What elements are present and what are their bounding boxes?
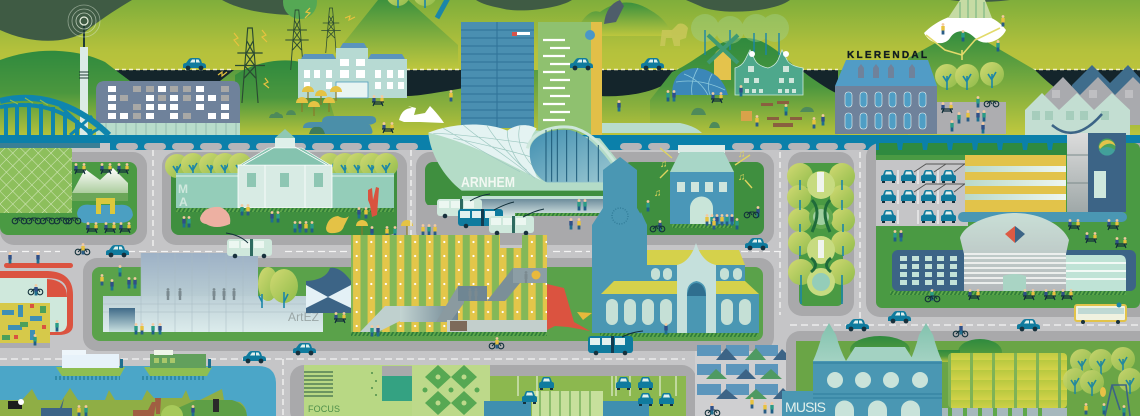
traffic on road 2: [243, 311, 1040, 363]
church: [600, 243, 759, 337]
panel: church block and house: [623, 145, 764, 235]
panel: Arnhem station block: [421, 124, 620, 236]
top hills and trees: [283, 0, 672, 70]
viaduct teeth over green: [876, 143, 1053, 150]
station glass front: [527, 127, 617, 182]
museum letters M and A: [178, 182, 188, 209]
yellow bus: [1075, 302, 1126, 324]
bush by pond: [309, 127, 325, 134]
sky background: [0, 0, 1140, 72]
panel: church block and house: ♫: [660, 159, 668, 170]
panel: sports field: [0, 252, 73, 348]
music notes: [660, 148, 752, 188]
parking lot: [876, 160, 968, 226]
road dashes on horizon: [115, 68, 1140, 70]
striped field east: [942, 353, 1067, 416]
cars on horizon: [570, 58, 664, 70]
panel: block A with lattice field: [0, 148, 137, 235]
yellow blob sculpture: [326, 216, 349, 233]
station name: ARNHEM: [461, 174, 515, 191]
dark cloud blobs: [0, 0, 1010, 41]
yellow stripe building: [965, 155, 1066, 212]
museum cupola: [275, 129, 295, 147]
water: [0, 366, 276, 416]
white school building: [298, 43, 407, 98]
ground background: [0, 70, 1140, 136]
ArtEZ lower wing: [103, 296, 323, 332]
red sculpture: [368, 187, 379, 217]
island with animals: [0, 388, 247, 416]
arena dome: [960, 213, 1069, 291]
panel: Focus block: [304, 365, 490, 416]
panel: fountain park: [787, 163, 855, 306]
pink blob sculpture: [200, 207, 230, 227]
music house: [670, 145, 734, 228]
panel: parking field: [484, 376, 686, 416]
blue pavilion: [306, 268, 351, 323]
teal band: [958, 212, 1127, 222]
allotment figures and beds: [617, 85, 825, 128]
panel: church block and house: ♫: [738, 149, 746, 160]
windmill: [708, 35, 738, 80]
road base: [0, 143, 1140, 416]
Klerendal snow cap and festival: [924, 0, 1006, 60]
panel: church block and house: ♫: [738, 172, 746, 183]
road outer rings: [0, 143, 1140, 416]
panel: neighbourhood houses: [695, 345, 786, 416]
row of houses right: [1025, 65, 1140, 135]
car on horizon road left: [183, 58, 206, 70]
striped building: [351, 235, 547, 336]
blue viaduct band: [0, 135, 1140, 150]
blue panel with logo: [1088, 133, 1126, 212]
panel: church block and house: ♫: [654, 188, 662, 199]
traffic on road 1: [75, 233, 768, 258]
smile arc: [1052, 114, 1102, 133]
electricity pylons: [218, 8, 355, 103]
diamonds field: [422, 365, 480, 415]
Musis label: MUSIS: [785, 399, 826, 415]
panel: ArtEZ block: [92, 235, 763, 341]
station lattice roof: [428, 124, 542, 181]
church tower: [592, 157, 647, 333]
umbrellas and lawn items: [269, 86, 453, 133]
gabled houses: [735, 50, 803, 95]
Klerendal plaza: [935, 62, 1006, 134]
faded lion and tree row: [660, 14, 789, 55]
green tower: [538, 22, 602, 135]
blue tower: [461, 22, 534, 128]
museum letters M and A: A: [179, 195, 188, 209]
ArtEZ logo: ArtEZ: [288, 310, 319, 324]
black river band: [115, 70, 1140, 100]
red star sculpture: [547, 284, 590, 331]
panel: museum block: [165, 129, 413, 238]
station shell: [428, 130, 620, 191]
lane markings: [0, 150, 1140, 416]
green hills: [0, 28, 1070, 135]
pond: [303, 116, 376, 134]
museum building: [238, 165, 332, 208]
Klerendal title: KLERENDAL: [847, 50, 927, 61]
panel: Musis block green: [796, 341, 1140, 416]
small hills behind Musis: [850, 336, 1002, 365]
trolleybuses at station: [437, 194, 544, 235]
trolleybus by church: [588, 331, 643, 355]
ArtEZ trees: [258, 267, 298, 308]
boats on water: [55, 350, 212, 378]
ArtEZ tower glass: [141, 253, 258, 308]
long pale train on viaduct: [602, 123, 702, 133]
grey tower segments: [1067, 133, 1088, 212]
grey office block: [96, 81, 240, 135]
telecom mast: [68, 5, 100, 135]
Klerendal building: [835, 60, 937, 134]
panel: east green block: [876, 114, 1140, 308]
east tree group and swing: [1063, 347, 1140, 416]
glass greenhouse dome: [672, 68, 728, 95]
white reclining sculpture: [399, 106, 444, 123]
zigzag stairs: [360, 268, 547, 332]
Focus label: FOCUS: [308, 404, 340, 414]
Musis building: [782, 323, 942, 416]
arena wings: [892, 250, 1136, 291]
bridge: [0, 98, 109, 135]
museum letters M and A: M: [178, 182, 188, 196]
